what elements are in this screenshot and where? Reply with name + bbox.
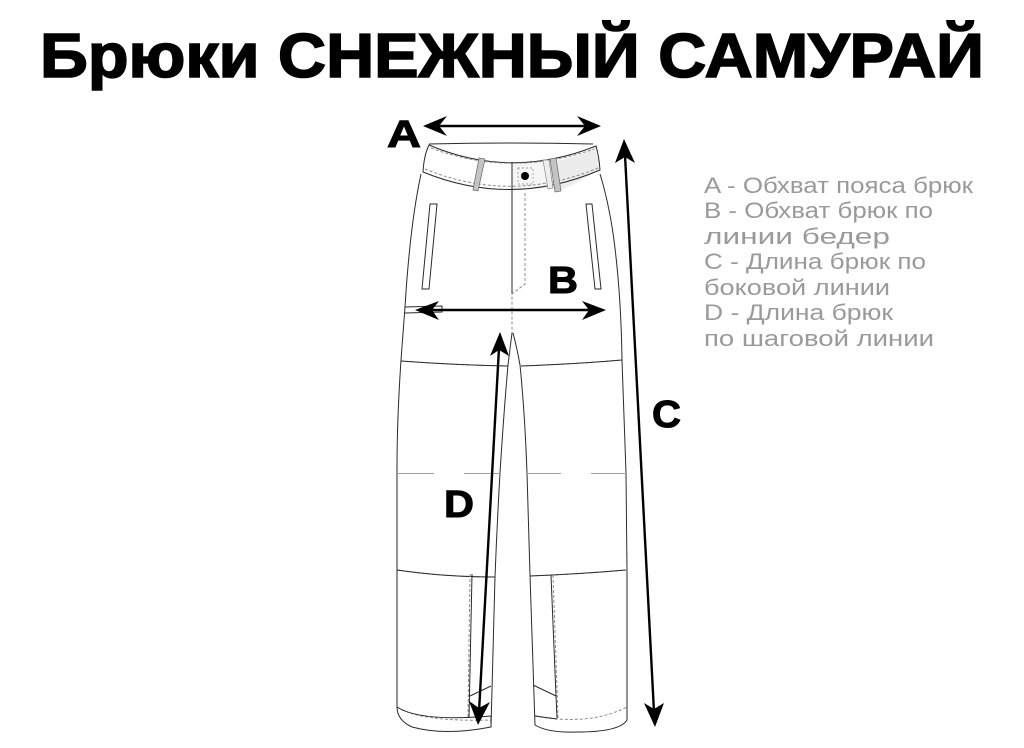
right leg panel <box>533 575 627 720</box>
label B: B <box>548 260 578 302</box>
legend text: линии бедер <box>704 224 890 249</box>
legend text: A - Обхват пояса брюк <box>704 173 973 198</box>
right pocket <box>586 204 601 289</box>
fly <box>512 162 525 333</box>
label A: A <box>387 114 421 156</box>
title: Брюки СНЕЖНЫЙ САМУРАЙ <box>40 21 984 91</box>
side zip <box>405 306 442 313</box>
arrow A <box>423 116 601 136</box>
trouser outline <box>397 174 512 732</box>
arrow C <box>615 139 664 727</box>
pants technical drawing <box>397 143 627 732</box>
legend text <box>704 173 973 351</box>
legend text: C - Длина брюк по <box>704 249 926 274</box>
left pocket <box>422 204 437 289</box>
legend text: боковой линии <box>704 275 890 300</box>
button <box>521 172 529 180</box>
waistband <box>423 143 600 192</box>
seam lines <box>397 360 626 577</box>
arrow D <box>469 332 509 725</box>
label D: D <box>444 484 474 526</box>
label C: C <box>652 394 681 436</box>
legend text: B - Обхват брюк по <box>704 198 933 223</box>
arrow B <box>415 301 606 320</box>
legend text: D - Длина брюк <box>704 300 893 325</box>
left leg panel <box>397 574 491 727</box>
legend text: по шаговой линии <box>704 326 934 351</box>
